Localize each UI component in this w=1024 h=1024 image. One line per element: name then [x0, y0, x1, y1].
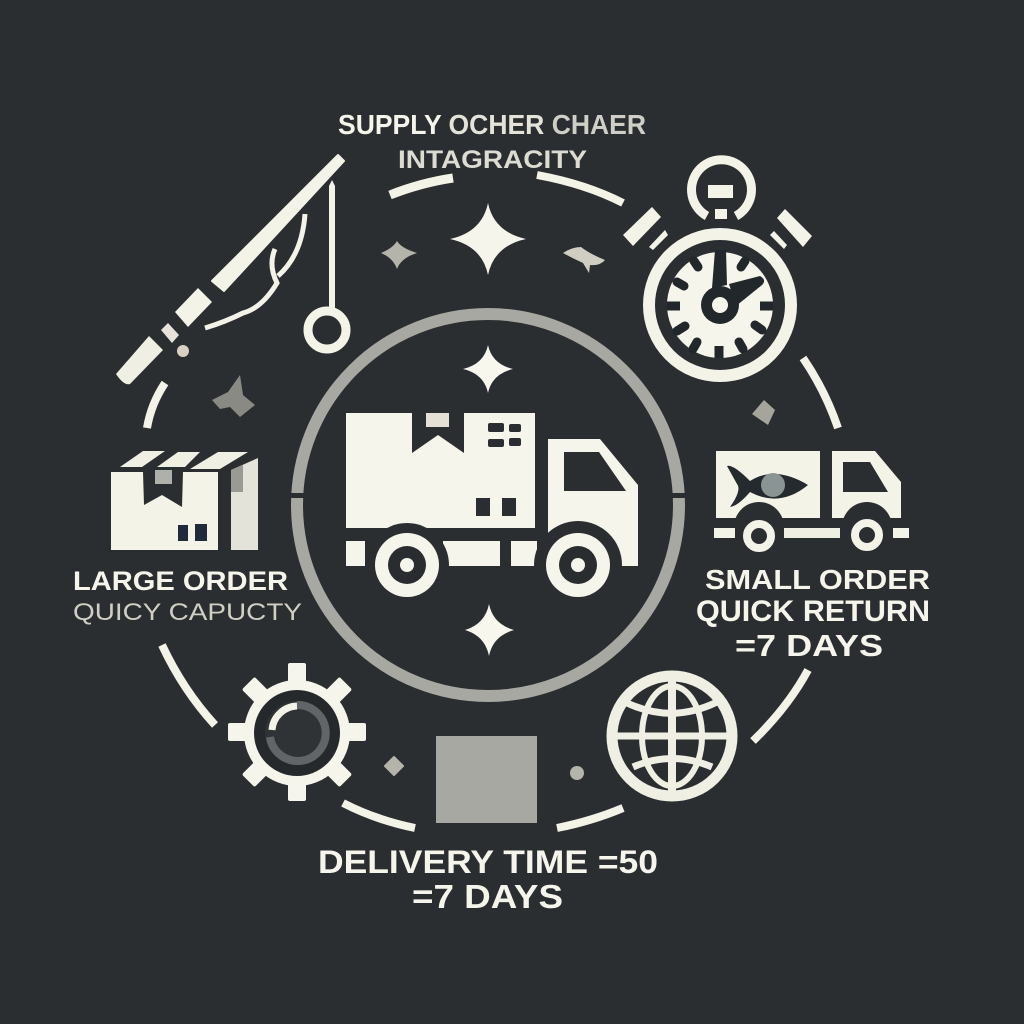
central circle — [285, 314, 690, 696]
delivery time label: =7 DAYS — [412, 878, 563, 915]
icon: center stars — [463, 345, 514, 656]
outer ring segments — [147, 175, 838, 828]
small order label: SMALL ORDER — [705, 564, 930, 595]
icon: fishing rod — [116, 155, 346, 384]
side buttons — [623, 207, 812, 250]
large order label — [73, 566, 302, 626]
icon: fish truck — [714, 451, 909, 552]
dial ticks — [667, 261, 773, 358]
title — [338, 109, 646, 174]
icon: gear — [228, 663, 366, 801]
large order label: QUICY CAPUCTY — [73, 599, 302, 626]
icon: globe — [612, 676, 732, 796]
delivery time label: DELIVERY TIME =50 — [318, 844, 658, 880]
dial hands — [712, 250, 727, 288]
delivery time label — [318, 844, 658, 915]
grey square — [436, 736, 537, 823]
dots — [385, 757, 584, 780]
small order label: QUICK RETURN — [696, 595, 930, 628]
icon: box — [111, 451, 258, 550]
icon: central truck — [346, 413, 638, 609]
small order label: =7 DAYS — [735, 628, 883, 663]
title: INTAGRACITY — [398, 146, 587, 174]
crown — [692, 160, 752, 219]
small order label — [696, 564, 930, 663]
icon: top stars — [212, 203, 775, 425]
icon: stopwatch — [623, 160, 812, 376]
title: SUPPLY OCHER CHAER — [338, 109, 646, 140]
large order label: LARGE ORDER — [73, 566, 288, 596]
